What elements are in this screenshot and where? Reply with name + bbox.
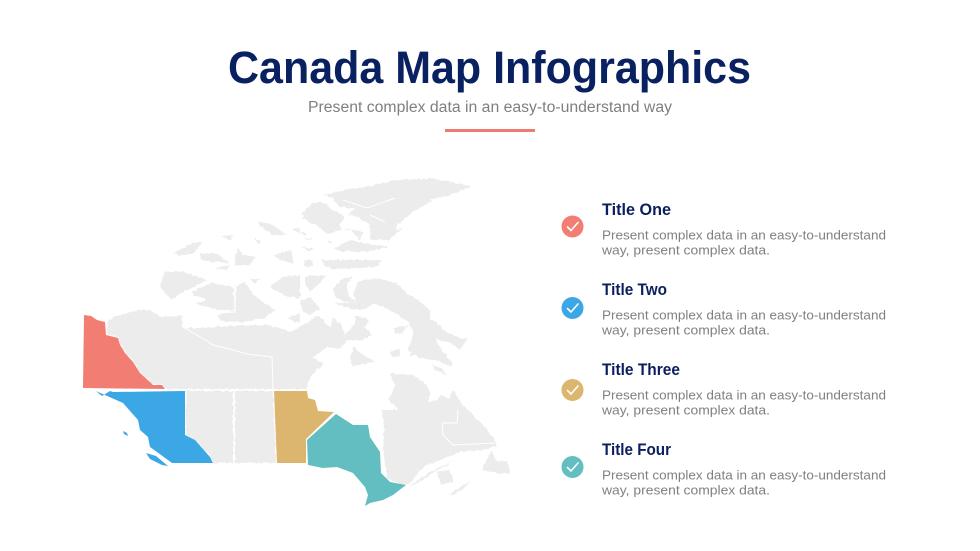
accent rule	[445, 129, 535, 132]
description: Present complex data in an easy-to-understand	[602, 228, 886, 242]
description: way, present complex data.	[601, 242, 770, 258]
icon: teal check	[562, 456, 584, 478]
heading: Title Four	[602, 441, 672, 459]
list item: Title Three	[562, 361, 886, 418]
icon: blue check	[562, 297, 584, 319]
map of Canada	[83, 178, 510, 506]
map: coloured regions	[83, 315, 406, 506]
region: gold province	[274, 391, 334, 463]
description: way, present complex data.	[601, 322, 770, 338]
region: red territory	[83, 315, 165, 389]
map: Baffin and central islands	[290, 260, 430, 368]
list item: Title Two	[562, 281, 886, 338]
map: grey mainland and arctic islands	[107, 178, 510, 495]
map: arctic west	[160, 222, 300, 323]
list item: Title One	[562, 201, 886, 258]
icon: red check	[562, 216, 584, 238]
map: south Baffin and Quebec	[388, 320, 487, 430]
description: way, present complex data.	[601, 402, 770, 418]
icon: gold check	[562, 379, 584, 401]
heading: Title One	[602, 201, 671, 219]
map: high arctic	[300, 178, 471, 252]
description: Present complex data in an easy-to-understand	[602, 388, 886, 402]
region: blue province	[96, 391, 213, 466]
list item: Title Four	[562, 441, 886, 498]
description: way, present complex data.	[601, 482, 770, 498]
title: Canada Map Infographics	[228, 42, 751, 93]
heading: Title Three	[602, 361, 680, 379]
description: Present complex data in an easy-to-understand	[602, 468, 886, 482]
region: teal province	[307, 414, 406, 506]
subtitle: Present complex data in an easy-to-understand way	[308, 99, 672, 116]
map: interior borders	[182, 196, 495, 445]
map: eastern Quebec and maritime provinces	[382, 410, 510, 495]
heading: Title Two	[602, 281, 667, 299]
description: Present complex data in an easy-to-understand	[602, 308, 886, 322]
